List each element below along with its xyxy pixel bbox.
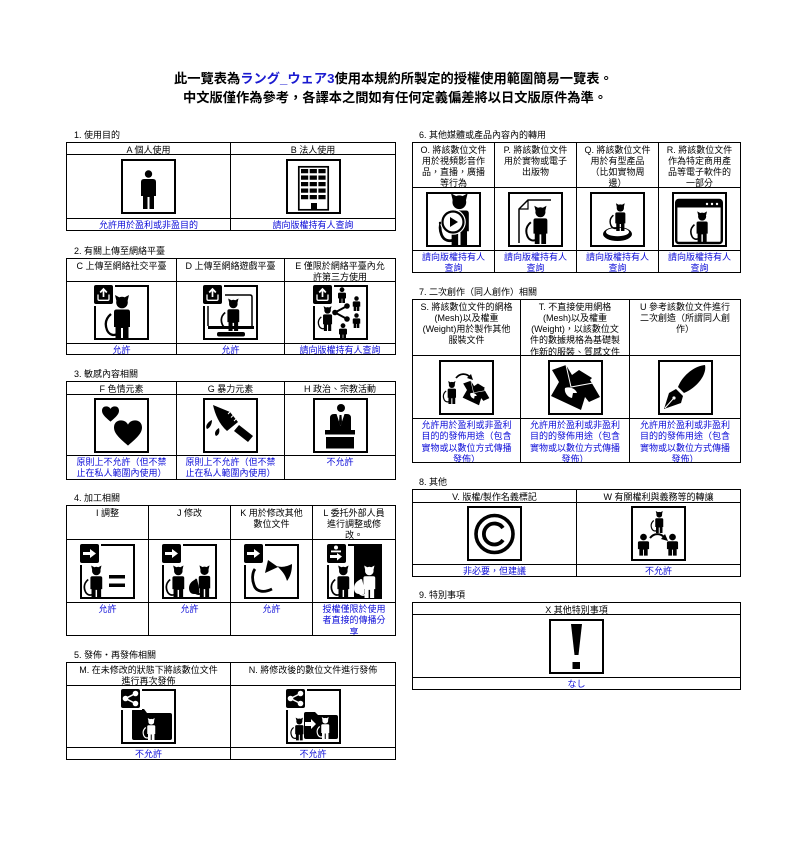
status: F G H: 原則上不允許（但不禁 [76, 457, 166, 467]
table: section 7: U 參考該數位文件進行 [640, 302, 730, 312]
table: section 5: N. 將修改後的數位文件進行發佈 [249, 664, 377, 674]
table: section 5: M. 在未修改的狀態下將該數位文件 [79, 664, 218, 674]
table: section 6: O. 將該數位文件 [420, 144, 486, 154]
icon: copyright [467, 506, 522, 561]
panel: 7 derivative works [412, 287, 741, 463]
status: O P Q R: 請向版權持有人 [422, 252, 485, 262]
icon: adjust [80, 544, 135, 599]
table: section 6: 用於有型產品 [590, 156, 644, 166]
table: section 2: C 上傳至網絡社交平臺 [76, 260, 166, 270]
heading: section 4: 4. 加工相關 [74, 493, 120, 503]
status: X [413, 678, 740, 689]
table: section 4: 數位文件 [253, 519, 290, 529]
heading: section 8: 8. 其他 [419, 477, 447, 487]
icon: share modified [286, 689, 341, 744]
table: section 7: 二次創造（所謂同人創 [640, 313, 730, 323]
table: section 7: 目的的發佈用途（包含 [640, 431, 730, 441]
icon: building [286, 159, 341, 214]
table: section 7 [412, 299, 741, 463]
status: M N: 不允許 [135, 749, 162, 759]
table: section 1: 請向版權持有人查詢 [272, 220, 354, 230]
heading: section 9: 9. 特別事項 [419, 590, 465, 600]
table: section 6 [412, 142, 741, 273]
table: section 6: （比如實物周 [590, 167, 644, 177]
status: S T U: 實物或以數位方式傳播 [421, 443, 512, 453]
heading: section 2: 2. 有關上傳至網絡平臺 [74, 246, 165, 256]
panel: 2 upload to platforms [66, 246, 396, 355]
status: A: 允許用於盈利或非盈目的 [99, 220, 198, 230]
table: section 2: E 僅限於網絡平臺內允 [295, 260, 385, 270]
icon: software window [672, 192, 727, 247]
icon: publication [508, 192, 563, 247]
table: section 3 [66, 381, 396, 480]
icon: third party use [313, 285, 368, 340]
heading: section 7: 7. 二次創作（同人創作）相關 [419, 287, 537, 297]
table: section 4: 授權僅限於使用 [322, 604, 386, 614]
icon: clothing [548, 360, 603, 415]
table: section 3: 不允許 [326, 457, 354, 467]
table: section 7: S. 將該數位文件的網格 [420, 302, 512, 312]
table: section 2: D 上傳至網絡遊戲平臺 [185, 260, 276, 270]
status: S T U: 目的的發佈用途（包含 [421, 431, 512, 441]
table: section 5 [66, 662, 396, 760]
table: section 7: 服裝文件 [448, 335, 484, 345]
table: section 3: G 暴力元素 [208, 384, 253, 394]
table: section 9 [412, 602, 741, 690]
table: section 6: 請向版權持有人 [668, 252, 731, 262]
table: section 4: L 委托外部人員 [323, 508, 385, 518]
table: section 6: 品等電子軟件的 [668, 167, 731, 177]
table: section 4: 進行調整或修 [327, 519, 381, 529]
status: F G H: 止在私人範圍內使用） [76, 468, 166, 478]
table: section 2 [66, 258, 396, 355]
table: section 7: 件的數據規格為基礎製 [530, 335, 620, 345]
icon: upload to game [203, 285, 258, 340]
panel: 9 special notes [412, 590, 741, 690]
icon: outsource [327, 544, 382, 599]
heading: section 6: 6. 其他媒體或產品內容內的轉用 [419, 130, 546, 140]
table: section 7: 實物或以數位方式傳播 [640, 443, 730, 453]
table: section 3: F 色情元素 [100, 384, 144, 394]
icon: upload to social [94, 285, 149, 340]
table: section 3: H 政治、宗教活動 [304, 384, 376, 394]
icon: knife [203, 398, 258, 453]
table: section 7: (Mesh)以及權重 [543, 313, 607, 323]
table: section 8: W 有關權利與義務等的轉讓 [604, 492, 714, 502]
status: O P Q R [413, 251, 494, 272]
status: I J K L [67, 603, 148, 635]
table: section 5: 不允許 [299, 749, 326, 759]
table: section 7: 允許用於盈利或非盈利 [530, 420, 620, 430]
table: section 6: R. 將該數位文件 [667, 144, 732, 154]
icon: modify [162, 544, 217, 599]
status: V W [413, 565, 576, 576]
icon: share folder [121, 689, 176, 744]
table: section 4: 允許 [262, 604, 280, 614]
icon: fountain pen [658, 360, 713, 415]
table: section 6: 用於實物或電子 [504, 156, 567, 166]
table: section 6: 作為特定商用產 [668, 156, 731, 166]
title [174, 71, 613, 104]
icon: video [426, 192, 481, 247]
table: section 7: T. 不直接使用網格 [539, 302, 611, 312]
table: section 8: 不允許 [645, 566, 672, 576]
icon: hearts [94, 398, 149, 453]
table: section 4 [66, 505, 396, 636]
table: section 7: 作） [676, 324, 694, 334]
table: section 3: 止在私人範圍內使用） [185, 468, 276, 478]
status: X: なし [567, 679, 586, 689]
icon: tail and ribbon [244, 544, 299, 599]
table: section 6: Q. 將該數位文件 [584, 144, 650, 154]
table: section 6: 品，直播，廣播 [422, 167, 485, 177]
panel: 6 other media [412, 130, 741, 273]
panel: 3 sensitive content [66, 369, 396, 480]
table: section 7: 允許用於盈利或非盈利 [640, 420, 730, 430]
status: S T U: 允許用於盈利或非盈利 [421, 420, 512, 430]
table: section 3: 原則上不允許（但不禁 [185, 457, 276, 467]
status: V W: 非必要，但建議 [463, 566, 526, 576]
table: section 7: (Mesh)以及權重 [434, 313, 498, 323]
table: section 1 [66, 142, 396, 231]
status: A [67, 219, 230, 230]
icon: exclamation [549, 619, 604, 674]
table: section 8: V. 版權/製作名義標記 [452, 492, 537, 502]
heading: section 3: 3. 敏感內容相關 [74, 369, 138, 379]
icon: person [121, 159, 176, 214]
panel: 4 modification [66, 493, 396, 636]
icon: cat to clothing [439, 360, 494, 415]
table: section 6: P. 將該數位文件 [504, 144, 567, 154]
icon: transfer of rights [631, 506, 686, 561]
table: section 7: 實物或以數位方式傳播 [530, 443, 620, 453]
heading: section 1: 1. 使用目的 [74, 130, 120, 140]
table: section 4: 者直接的傳播分 [322, 615, 386, 625]
table: section 4: J 修改 [177, 508, 202, 518]
table: section 7: 目的的發佈用途（包含 [530, 431, 620, 441]
panel: 5 redistribution [66, 650, 396, 760]
table: section 7: (Weight)，以該數位文 [531, 324, 619, 334]
status: I J K L: 允許 [98, 604, 116, 614]
table: section 4: K 用於修改其他 [240, 508, 303, 518]
table: section 7: (Weight)用於製作其他 [423, 324, 510, 334]
status: M N [67, 748, 230, 759]
panel: 8 other [412, 477, 741, 577]
title: 此一覽表為ラング_ウェア3使用本規約所製定的授權使用範圍簡易一覽表。 [174, 71, 613, 86]
panel: 1 usage purpose [66, 130, 396, 231]
icon: speaker at podium [313, 398, 368, 453]
title: 中文版僅作為參考，各譯本之間如有任何定義偏差將以日文版原件為準。 [183, 90, 607, 104]
table: section 6: 請向版權持有人 [504, 252, 567, 262]
table: section 4: 允許 [180, 604, 198, 614]
table: section 6: 用於視頻影音作 [422, 156, 485, 166]
heading: section 5: 5. 發佈・再發佈相關 [74, 650, 156, 660]
table: section 6: 出版物 [522, 167, 549, 177]
table: section 8 [412, 489, 741, 577]
status: C D E [67, 344, 176, 354]
table: section 4: I 調整 [96, 508, 119, 518]
icon: figure [590, 192, 645, 247]
table: section 6: 請向版權持有人 [586, 252, 649, 262]
status: S T U [413, 419, 520, 462]
status: F G H [67, 456, 176, 479]
